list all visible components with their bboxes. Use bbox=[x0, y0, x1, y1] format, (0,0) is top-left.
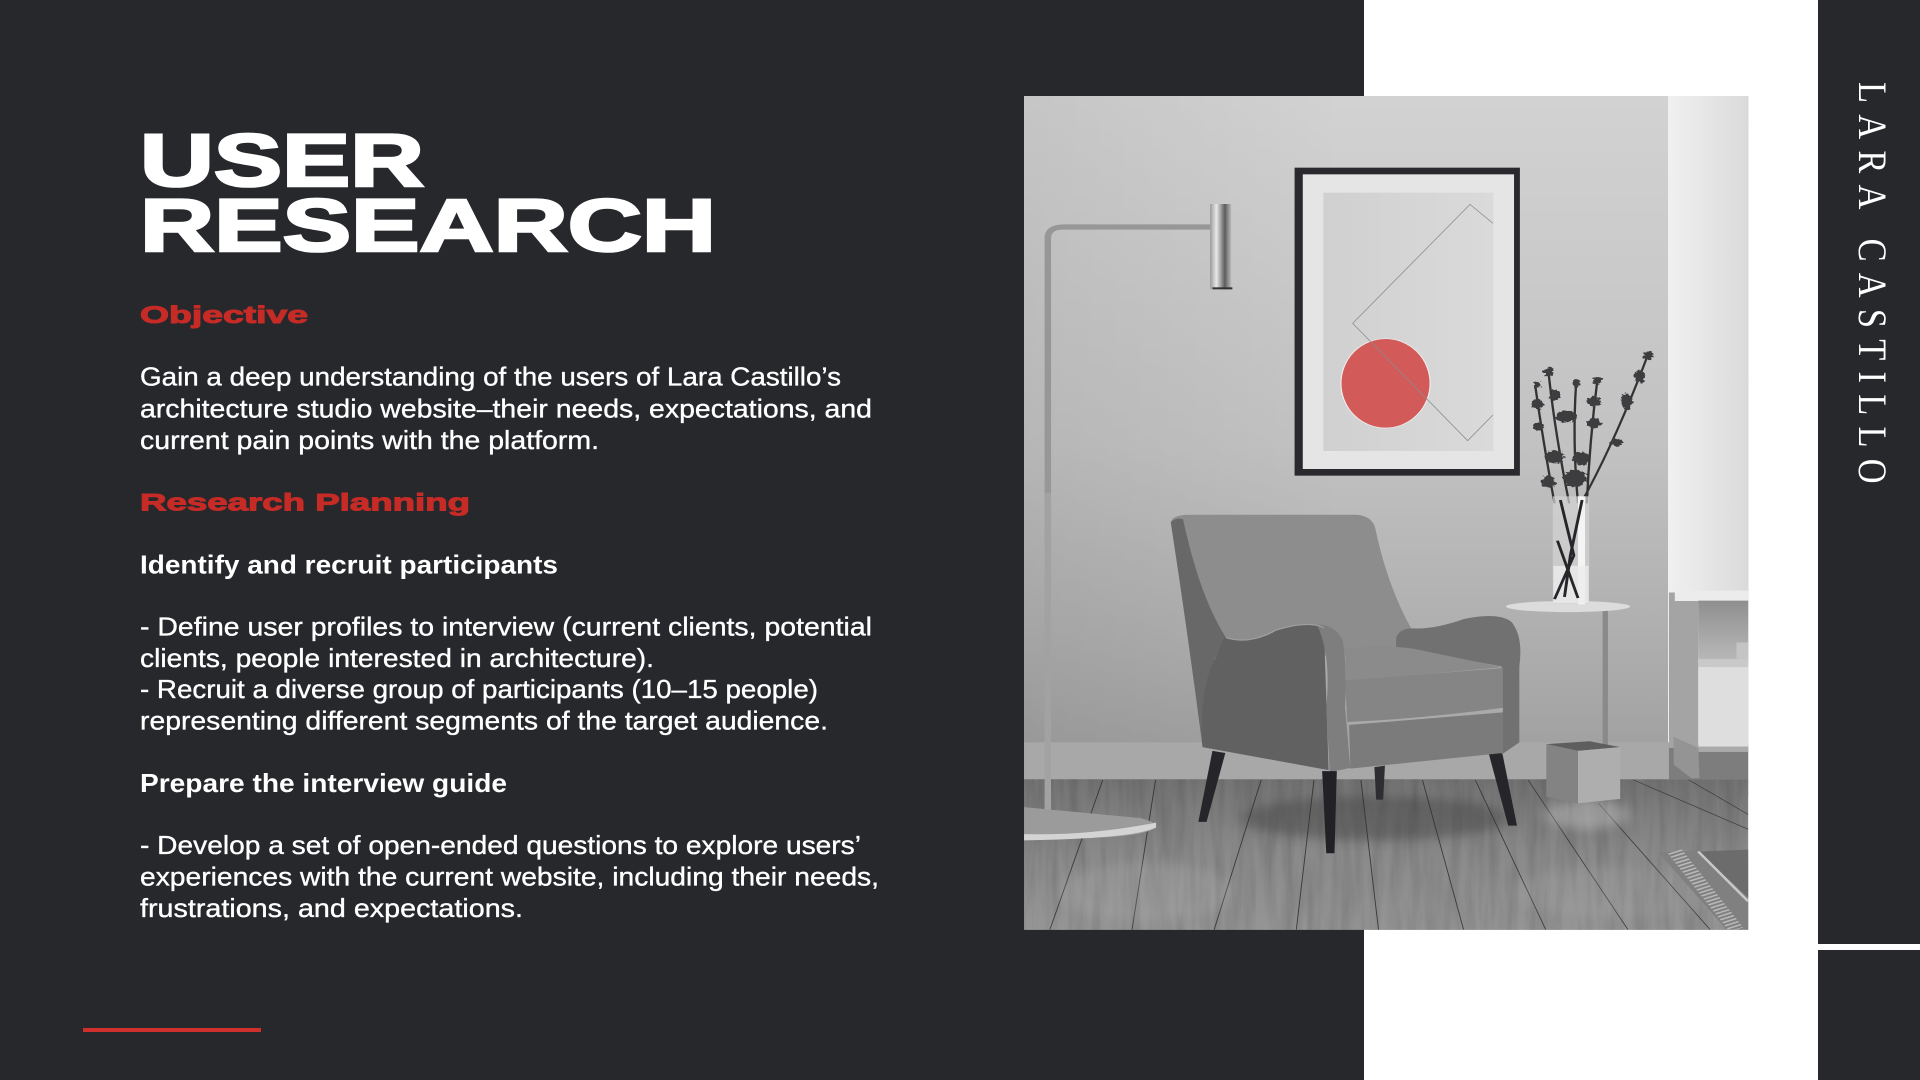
armchair bbox=[1171, 515, 1520, 853]
text block: participant bullets: - Recruit a diverse group of participants (10–15 people) bbox=[140, 674, 818, 704]
side table bbox=[1506, 601, 1630, 803]
left side panel bbox=[1202, 625, 1329, 770]
text block: objective description: Gain a deep understanding of the users of Lara Castillo’s bbox=[140, 361, 841, 391]
floor bbox=[1024, 770, 1748, 930]
vase bbox=[1553, 496, 1589, 604]
subheading: identify participants: Identify and recruit participants bbox=[140, 550, 558, 580]
front leg bbox=[1322, 771, 1337, 853]
text block: participant bullets: clients, people interested in architecture). bbox=[140, 643, 654, 673]
subheading: interview guide: Prepare the interview guide bbox=[140, 768, 507, 798]
heading: research planning: Research Planning bbox=[140, 490, 470, 516]
title: USER bbox=[140, 119, 424, 202]
text block: participant bullets: - Define user profiles to interview (current clients, potential bbox=[140, 612, 872, 642]
lamp base bbox=[1024, 493, 1156, 840]
text block: objective description bbox=[140, 361, 872, 455]
seat cushion bbox=[1345, 647, 1502, 681]
baseboard bbox=[1024, 742, 1670, 779]
left arm front bbox=[1317, 624, 1350, 772]
chair back bbox=[1171, 515, 1411, 655]
photo: armchair interior with framed art bbox=[1024, 96, 1749, 930]
text block: participant bullets: representing different segments of the target audience. bbox=[140, 706, 828, 736]
rug bbox=[1658, 850, 1748, 930]
text block: participant bullets bbox=[140, 612, 872, 736]
framed art bbox=[1295, 168, 1520, 476]
heading: objective: Objective bbox=[140, 302, 308, 329]
text block: interview guide bullet: frustrations, and expectations. bbox=[140, 893, 523, 923]
text block: interview guide bullet: experiences with the current website, including their needs, bbox=[140, 862, 879, 892]
front panel bbox=[1349, 712, 1503, 769]
text block: interview guide bullet bbox=[140, 830, 879, 923]
text block: interview guide bullet: - Develop a set of open-ended questions to explore users’ bbox=[140, 830, 861, 860]
floor lamp arm and head bbox=[1044, 204, 1232, 492]
white middle band bbox=[1364, 0, 1920, 1080]
left dark panel bbox=[0, 0, 1364, 1080]
sidebar vertical brand name: LARA CASTILLO bbox=[1849, 82, 1893, 484]
title bbox=[140, 119, 716, 267]
text block: objective description: current pain points with the platform. bbox=[140, 425, 599, 455]
lower scene bbox=[1024, 493, 1748, 930]
text block: objective description: architecture studio website–their needs, expectations, and bbox=[140, 394, 872, 424]
plant in vase bbox=[1531, 351, 1654, 503]
back legs bbox=[1198, 751, 1225, 822]
cabinet bbox=[1669, 591, 1748, 780]
upper scene bbox=[1045, 168, 1654, 547]
title: RESEARCH bbox=[140, 184, 716, 267]
red accent line bbox=[83, 1028, 261, 1032]
right arm bbox=[1396, 616, 1520, 755]
right dark sidebar bbox=[1818, 0, 1920, 1080]
